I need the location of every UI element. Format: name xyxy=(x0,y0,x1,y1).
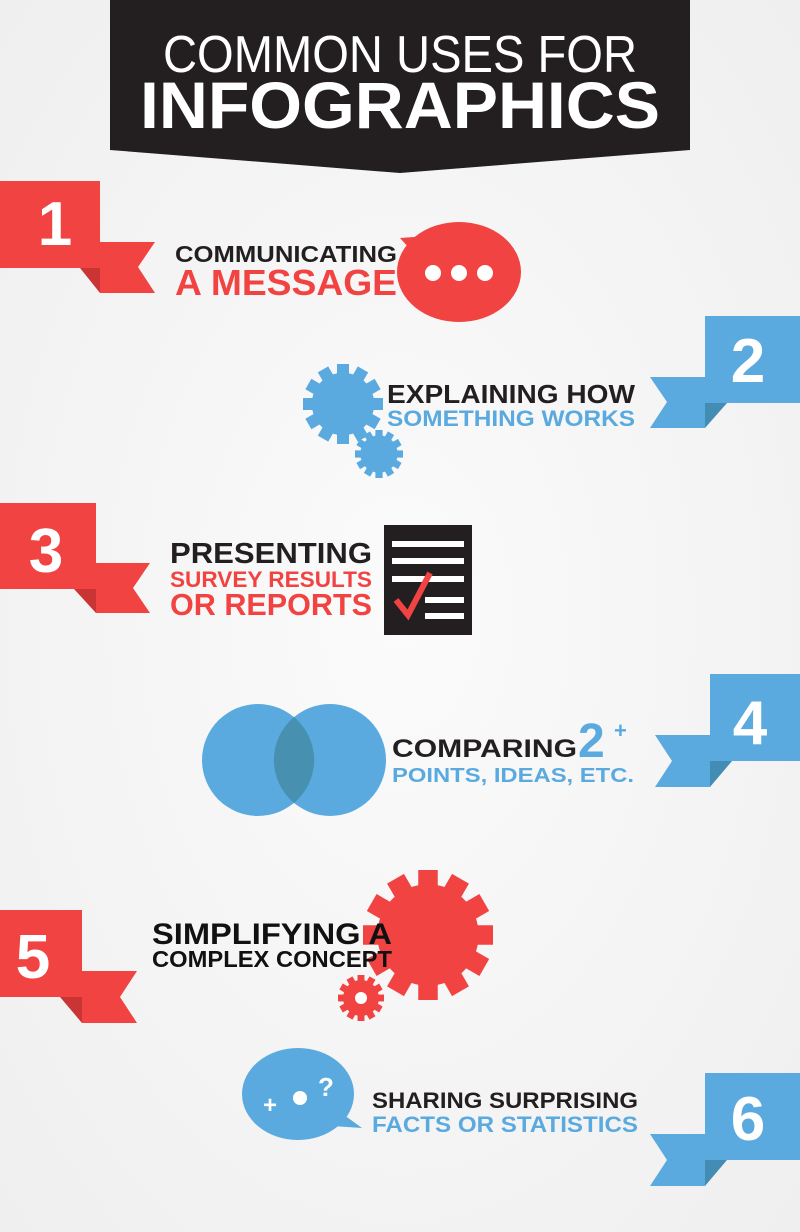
ribbon 6 xyxy=(650,1073,800,1186)
ribbon 3 xyxy=(0,503,150,613)
icon: venn diagram xyxy=(202,704,386,816)
text 4: 2 xyxy=(578,715,605,768)
ribbon 4 xyxy=(655,674,800,787)
text 4: + xyxy=(614,718,627,743)
text 2 xyxy=(387,379,635,431)
ribbon 3: 3 xyxy=(29,517,63,586)
ribbon 1: 1 xyxy=(38,190,72,259)
text 5 xyxy=(152,918,392,972)
title banner xyxy=(110,0,690,173)
icon: blue speech bubble: + xyxy=(263,1092,277,1119)
text 6 xyxy=(372,1088,638,1137)
text 6: FACTS OR STATISTICS xyxy=(372,1112,638,1137)
ribbon 5: 5 xyxy=(16,923,50,992)
icon: blue gears xyxy=(303,364,403,478)
text 1: A MESSAGE xyxy=(175,262,397,303)
text 1 xyxy=(175,241,397,303)
text 3: PRESENTING xyxy=(170,538,372,570)
ribbon 1 xyxy=(0,181,155,293)
ribbon 2: 2 xyxy=(731,327,765,396)
text 3 xyxy=(170,538,372,622)
text 5: COMPLEX CONCEPT xyxy=(152,946,392,972)
text 4: COMPARING xyxy=(392,735,577,763)
icon: red gears xyxy=(338,870,493,1021)
ribbon 6: 6 xyxy=(731,1085,765,1154)
icon: speech bubble red xyxy=(397,222,521,322)
text 4: POINTS, IDEAS, ETC. xyxy=(392,765,634,787)
title banner: COMMON USES FOR xyxy=(163,26,637,84)
text 3: SURVEY RESULTS xyxy=(170,567,372,592)
text 6: SHARING SURPRISING xyxy=(372,1088,638,1113)
ribbon 2 xyxy=(650,316,800,428)
icon: checklist xyxy=(384,525,472,635)
text 2: SOMETHING WORKS xyxy=(387,406,635,431)
text 1: COMMUNICATING xyxy=(175,241,397,267)
icon: blue speech bubble xyxy=(242,1048,362,1140)
text 2: EXPLAINING HOW xyxy=(387,379,635,409)
icon: blue speech bubble: ? xyxy=(318,1072,334,1102)
title banner: INFOGRAPHICS xyxy=(140,68,660,142)
ribbon 4: 4 xyxy=(733,689,768,758)
text 4 xyxy=(392,715,634,787)
text 3: OR REPORTS xyxy=(170,587,372,622)
ribbon 5 xyxy=(0,910,137,1023)
text 5: SIMPLIFYING A xyxy=(152,918,392,951)
